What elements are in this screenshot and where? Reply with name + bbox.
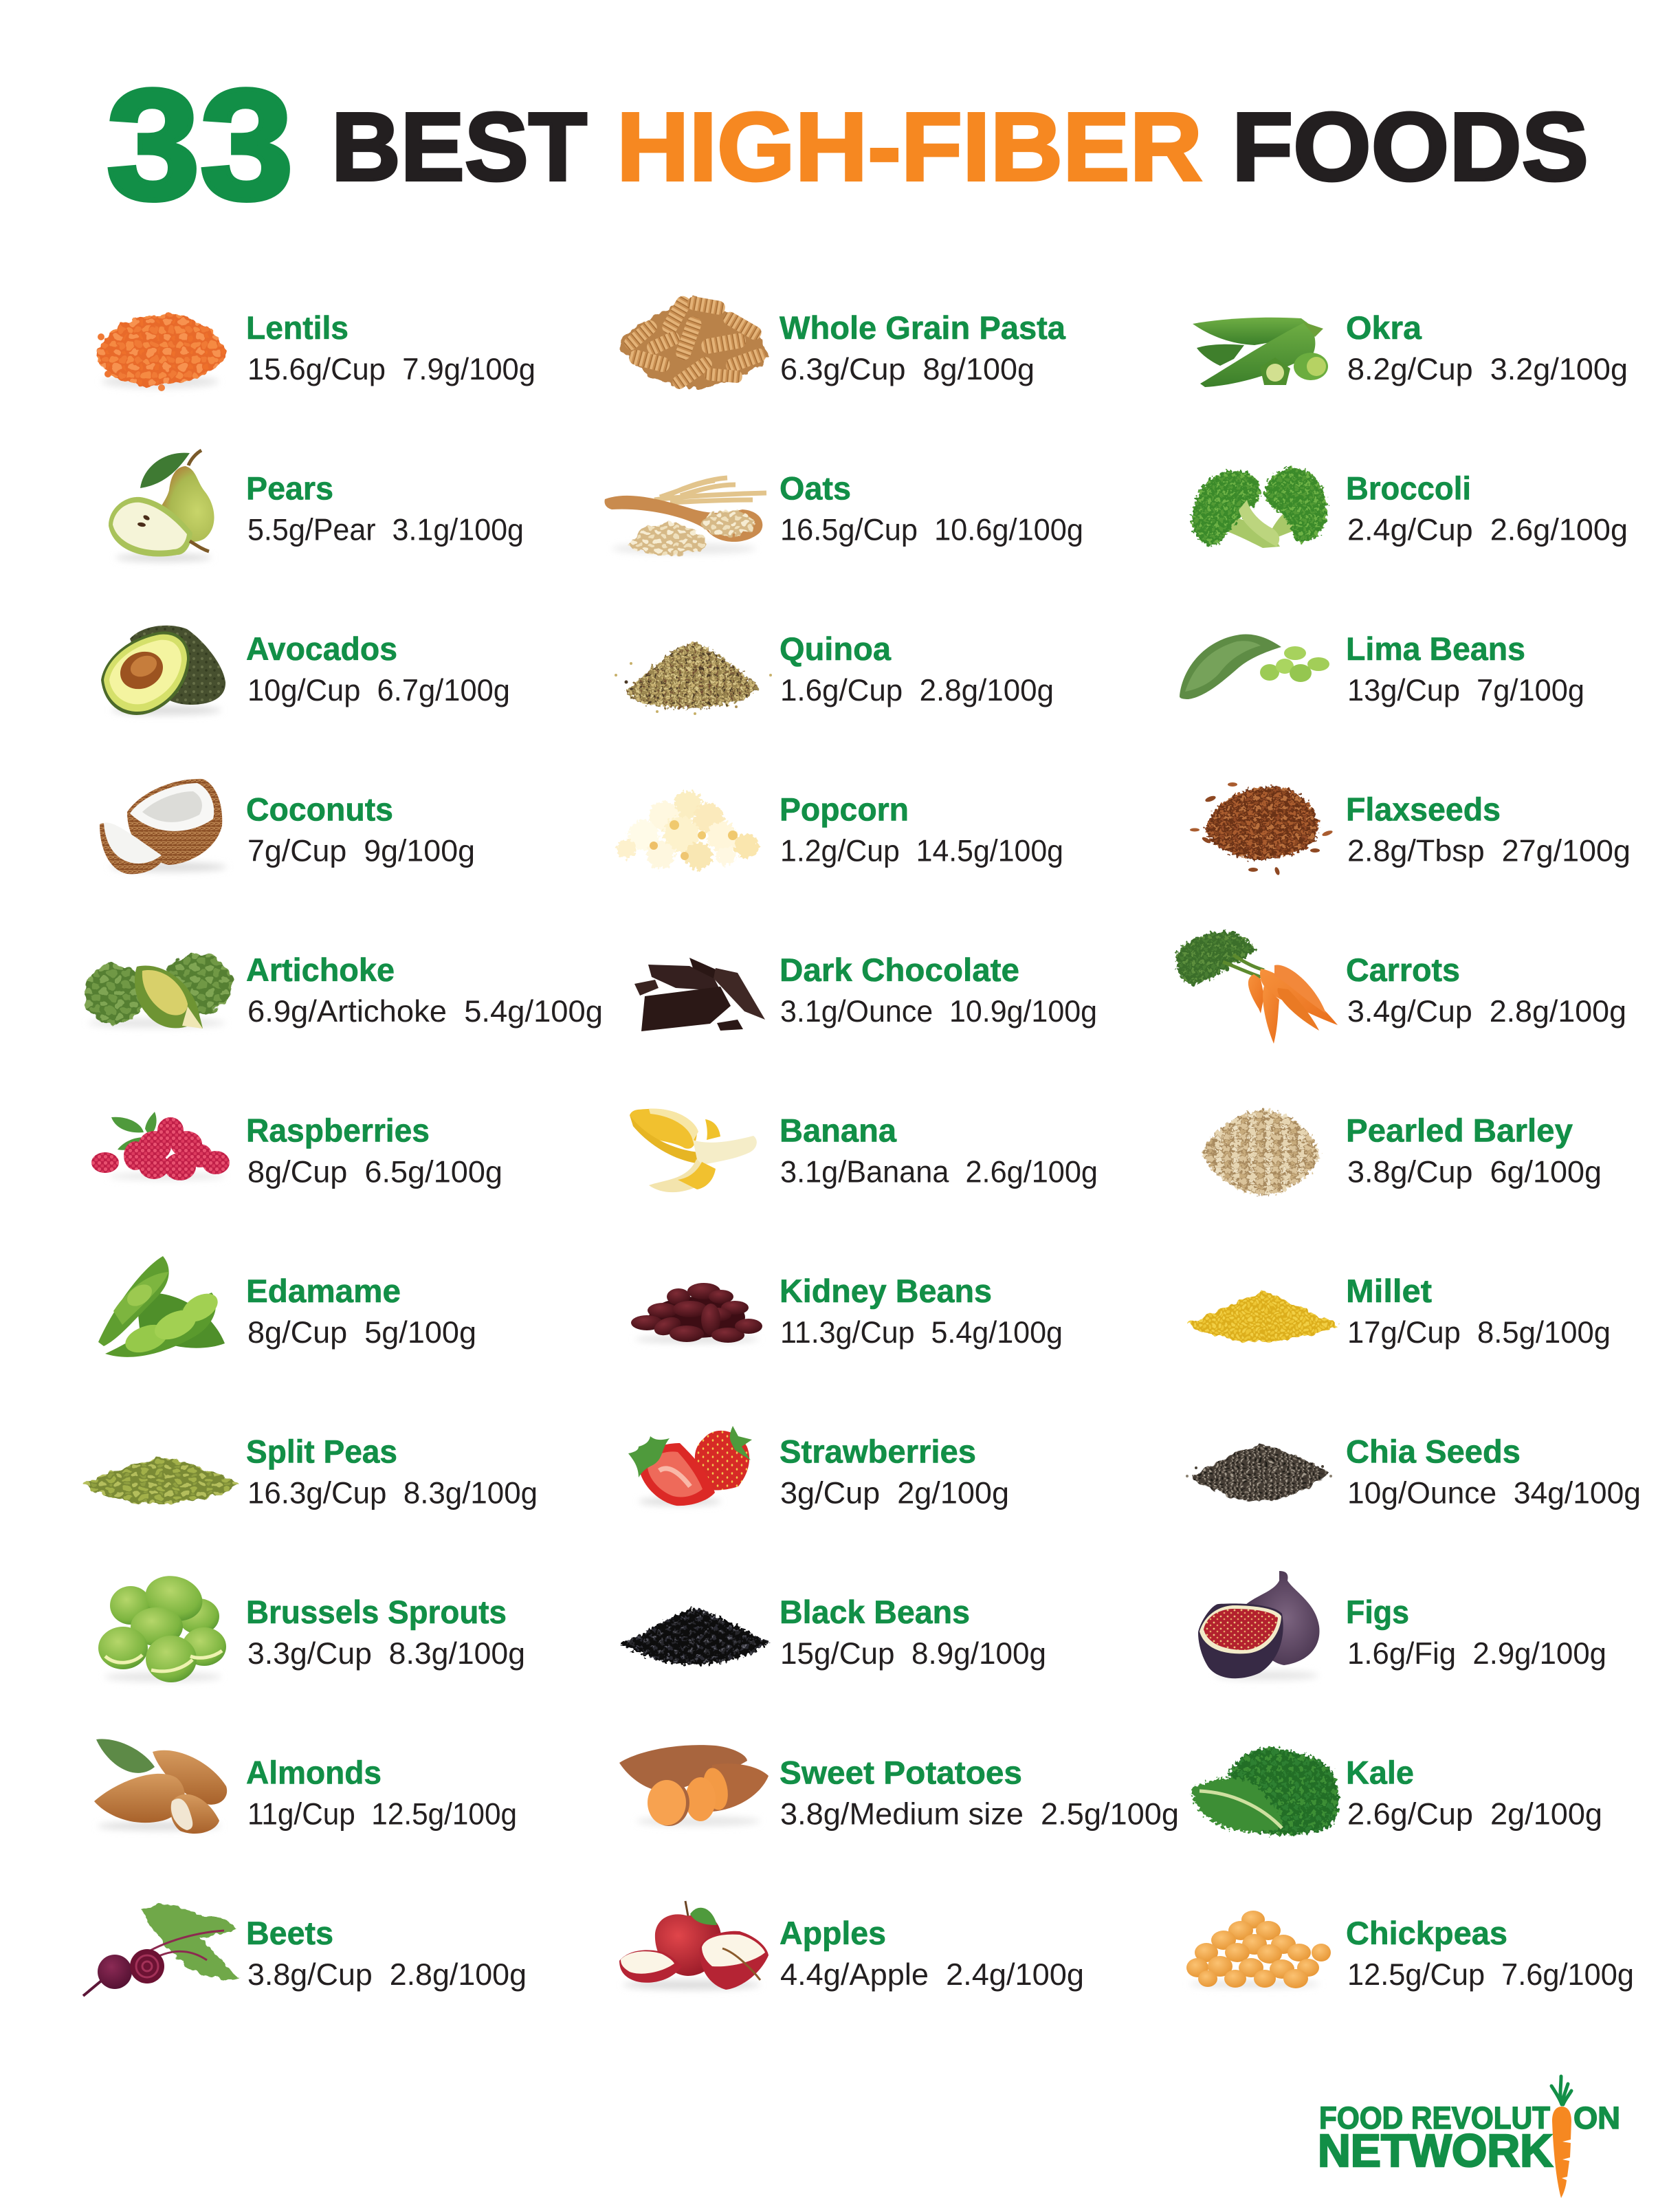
fiber values: 3.1g/Banana 2.6g/100g <box>780 1155 1098 1189</box>
name: Dark Chocolate <box>780 952 1019 988</box>
icon: beets <box>83 1904 240 1996</box>
food: Artichoke <box>85 952 603 1029</box>
fiber values: 1.6g/Cup 2.8g/100g <box>780 674 1054 707</box>
food: Banana <box>630 1109 1098 1192</box>
fiber values: 10g/Cup 6.7g/100g <box>247 674 510 707</box>
fiber values: 2.8g/Tbsp 27g/100g <box>1347 835 1631 868</box>
food: Millet <box>1187 1273 1611 1350</box>
fiber values: 3.1g/Ounce 10.9g/100g <box>780 995 1097 1029</box>
food: Pears <box>109 450 524 562</box>
fiber values: 12.5g/Cup 7.6g/100g <box>1347 1958 1634 1992</box>
food: Carrots <box>1176 932 1626 1044</box>
icon: figs <box>1198 1571 1320 1680</box>
icon: lentils <box>97 314 226 391</box>
fiber values: 13g/Cup 7g/100g <box>1347 674 1584 707</box>
title word BEST: BEST <box>331 92 587 201</box>
food: Chia Seeds <box>1186 1433 1641 1510</box>
food: Strawberries <box>628 1426 1009 1510</box>
name: Quinoa <box>780 630 892 667</box>
name: Coconuts <box>246 791 393 828</box>
icon: carrots <box>1176 932 1338 1044</box>
fiber values: 1.2g/Cup 14.5g/100g <box>780 835 1063 868</box>
logo text line 2: NETWORK <box>1318 2125 1553 2177</box>
icon: coconuts <box>100 779 227 874</box>
fiber values: 3.4g/Cup 2.8g/100g <box>1347 995 1626 1029</box>
name: Chia Seeds <box>1346 1433 1521 1470</box>
name: Raspberries <box>246 1112 430 1148</box>
name: Flaxseeds <box>1346 791 1501 828</box>
fiber values: 16.5g/Cup 10.6g/100g <box>780 513 1083 547</box>
name: Broccoli <box>1346 470 1471 506</box>
food: Brussels Sprouts <box>98 1570 525 1682</box>
title word FOODS: FOODS <box>1232 92 1589 201</box>
name: Beets <box>246 1915 333 1951</box>
icon: chia seeds <box>1186 1444 1332 1502</box>
name: Pears <box>246 470 333 506</box>
name: Pearled Barley <box>1346 1112 1573 1148</box>
icon: black beans <box>619 1607 769 1664</box>
name: Lima Beans <box>1346 630 1525 667</box>
icon: apples <box>619 1901 769 1990</box>
logo text line 1: FOOD REVOLUT <box>1319 2100 1550 2135</box>
icon: whole grain pasta <box>620 294 769 391</box>
food: Figs <box>1198 1571 1606 1680</box>
icon: pearled barley <box>1202 1110 1320 1196</box>
food: Sweet Potatoes <box>619 1745 1179 1832</box>
food: Apples <box>619 1901 1084 1992</box>
food: Lima Beans <box>1180 630 1584 707</box>
icon: millet <box>1187 1291 1340 1342</box>
fiber values: 10g/Ounce 34g/100g <box>1347 1477 1641 1510</box>
icon: sweet potatoes <box>619 1745 769 1826</box>
icon: raspberries <box>91 1112 230 1180</box>
name: Figs <box>1346 1594 1409 1630</box>
fiber values: 15g/Cup 8.9g/100g <box>780 1637 1046 1671</box>
food: Edamame <box>98 1256 476 1358</box>
fiber values: 4.4g/Apple 2.4g/100g <box>780 1958 1084 1992</box>
fiber values: 11g/Cup 12.5g/100g <box>247 1797 517 1832</box>
icon: artichoke <box>85 954 232 1029</box>
food: Whole Grain Pasta <box>620 294 1066 391</box>
food: Flaxseeds <box>1190 782 1631 876</box>
icon: broccoli <box>1191 468 1327 548</box>
name: Almonds <box>246 1755 382 1790</box>
name: Black Beans <box>780 1594 970 1630</box>
name: Strawberries <box>780 1433 976 1470</box>
food: Pearled Barley <box>1202 1110 1602 1196</box>
name: Apples <box>780 1915 886 1951</box>
fiber values: 8g/Cup 5g/100g <box>247 1316 476 1350</box>
icon: kale <box>1191 1747 1339 1834</box>
food: Okra <box>1193 309 1628 387</box>
food: Lentils <box>97 309 535 391</box>
food: Kale <box>1191 1747 1602 1834</box>
icon: edamame <box>98 1256 225 1358</box>
icon: chickpeas <box>1186 1911 1331 1988</box>
food: Kidney Beans <box>631 1273 1063 1350</box>
food: Popcorn <box>617 791 1063 870</box>
title words HIGH-FIBER: HIGH-FIBER <box>617 92 1202 201</box>
icon: banana <box>630 1109 757 1192</box>
fiber values: 8g/Cup 6.5g/100g <box>247 1155 502 1189</box>
fiber values: 2.4g/Cup 2.6g/100g <box>1347 513 1628 547</box>
icon: quinoa <box>615 642 772 715</box>
fiber values: 6.9g/Artichoke 5.4g/100g <box>247 995 603 1029</box>
fiber values: 8.2g/Cup 3.2g/100g <box>1347 353 1628 386</box>
icon: pears <box>109 450 214 562</box>
food: Chickpeas <box>1186 1911 1634 1992</box>
food: Oats <box>604 470 1083 555</box>
fiber values: 3.8g/Cup 6g/100g <box>1347 1155 1602 1189</box>
name: Kale <box>1346 1755 1414 1790</box>
name: Sweet Potatoes <box>780 1755 1022 1790</box>
name: Okra <box>1346 309 1422 346</box>
name: Lentils <box>246 309 349 346</box>
name: Oats <box>780 470 851 506</box>
name: Split Peas <box>246 1433 397 1470</box>
icon: avocados <box>101 626 225 715</box>
icon: carrot <box>1551 2076 1571 2198</box>
fiber values: 3.8g/Cup 2.8g/100g <box>247 1958 527 1992</box>
name: Artichoke <box>246 952 395 988</box>
fiber values: 6.3g/Cup 8g/100g <box>780 353 1035 386</box>
icon: strawberries <box>628 1426 752 1506</box>
icon: oats with spoon <box>604 478 766 555</box>
name: Popcorn <box>780 791 909 828</box>
icon: dark chocolate <box>634 958 765 1031</box>
icon: popcorn <box>617 791 759 870</box>
food: Dark Chocolate <box>634 952 1097 1031</box>
fiber values: 3.3g/Cup 8.3g/100g <box>247 1637 525 1671</box>
icon: lima beans <box>1180 634 1329 699</box>
icon: flaxseeds <box>1190 782 1334 876</box>
fiber values: 2.6g/Cup 2g/100g <box>1347 1797 1602 1832</box>
food: Quinoa <box>615 630 1054 715</box>
food: Avocados <box>101 626 510 715</box>
name: Avocados <box>246 630 397 667</box>
fiber values: 5.5g/Pear 3.1g/100g <box>247 513 524 547</box>
food: Beets <box>83 1904 527 1996</box>
name: Edamame <box>246 1273 401 1309</box>
logo: Food Revolution Network <box>1318 2076 1620 2198</box>
name: Millet <box>1346 1273 1432 1309</box>
icon: kidney beans <box>631 1283 762 1343</box>
fiber values: 1.6g/Fig 2.9g/100g <box>1347 1637 1606 1671</box>
food: Split Peas <box>83 1433 538 1510</box>
fiber values: 15.6g/Cup 7.9g/100g <box>247 353 535 386</box>
fiber values: 3.8g/Medium size 2.5g/100g <box>780 1797 1179 1832</box>
food: Black Beans <box>619 1594 1046 1671</box>
food: Coconuts <box>100 779 475 874</box>
name: Brussels Sprouts <box>246 1594 507 1630</box>
fiber values: 7g/Cup 9g/100g <box>247 835 475 868</box>
icon: almonds <box>94 1739 227 1834</box>
icon: okra <box>1193 318 1328 387</box>
icon: brussels sprouts <box>98 1570 226 1682</box>
logo text line 1 end: ON <box>1573 2100 1620 2135</box>
fiber values: 3g/Cup 2g/100g <box>780 1477 1009 1510</box>
title number 33: 33 <box>107 58 294 232</box>
food: Raspberries <box>91 1112 502 1189</box>
name: Kidney Beans <box>780 1273 992 1309</box>
title <box>107 58 1589 232</box>
food: Broccoli <box>1191 468 1628 548</box>
fiber values: 17g/Cup 8.5g/100g <box>1347 1316 1611 1350</box>
fiber values: 11.3g/Cup 5.4g/100g <box>780 1316 1063 1350</box>
food: Almonds <box>94 1739 517 1834</box>
name: Whole Grain Pasta <box>780 309 1066 346</box>
fiber values: 16.3g/Cup 8.3g/100g <box>247 1477 538 1510</box>
name: Carrots <box>1346 952 1460 988</box>
name: Banana <box>780 1112 897 1148</box>
icon: split peas <box>83 1458 237 1504</box>
name: Chickpeas <box>1346 1915 1507 1951</box>
